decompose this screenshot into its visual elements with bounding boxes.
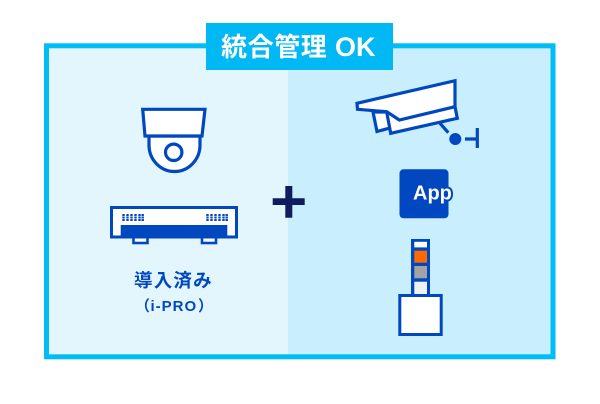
frame — [46, 46, 553, 357]
panel: left installed side — [46, 46, 288, 357]
icon: recorder — [112, 208, 236, 243]
text: installed label: （ — [135, 298, 150, 315]
icon: app — [400, 169, 452, 218]
icon: signal tower — [400, 240, 441, 334]
panel: right added side — [288, 46, 553, 357]
icon: app: App — [413, 182, 452, 204]
heading: unified management OK: 統合管理 — [221, 32, 327, 62]
icon: bullet camera — [357, 81, 477, 148]
text: installed label: ） — [198, 298, 213, 315]
icon: plus — [273, 186, 305, 218]
heading: unified management OK — [206, 23, 393, 70]
text: installed label: i-PRO — [150, 298, 197, 315]
text: installed label — [134, 270, 213, 315]
text: installed label: 導入済み — [134, 270, 213, 291]
heading: unified management OK: OK — [335, 32, 376, 62]
icon: dome camera — [143, 109, 205, 172]
